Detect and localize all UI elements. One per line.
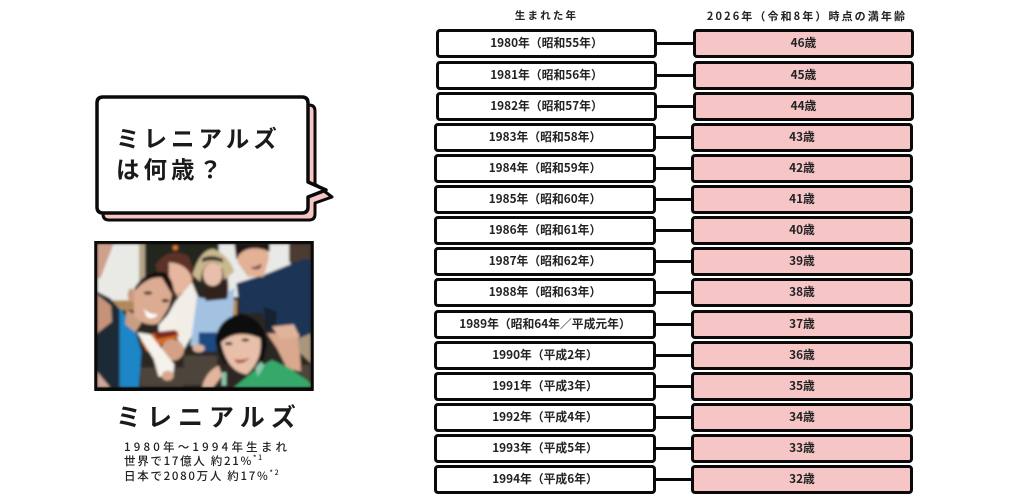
row: 1993 <box>434 434 913 463</box>
row: 1993: 1993年（平成5年） <box>492 439 598 456</box>
row: 1989: 1989年（昭和64年／平成元年） <box>459 315 631 332</box>
row: 1990: 36歳 <box>789 346 815 363</box>
bubble heading: は何歳？ <box>116 151 226 185</box>
row: 1982 <box>436 92 914 121</box>
row: 1983: 1983年（昭和58年） <box>489 128 601 145</box>
row: 1988: 38歳 <box>789 283 815 300</box>
row: 1994: 1994年（平成6年） <box>492 470 598 487</box>
row: 1992: 1992年（平成4年） <box>492 408 598 425</box>
row: 1981: 1981年（昭和56年） <box>490 66 603 83</box>
row: 1985: 1985年（昭和60年） <box>489 190 601 207</box>
summary text <box>124 438 290 484</box>
row: 1989: 37歳 <box>789 315 815 332</box>
row: 1985 <box>434 185 913 214</box>
row: 1988 <box>434 278 913 307</box>
row: 1986 <box>434 216 913 245</box>
row: 1991 <box>434 372 913 401</box>
column heading: age in 2026: 2026年（令和8年）時点の満年齢 <box>707 8 907 24</box>
row: 1981: 45歳 <box>791 66 816 83</box>
row: 1985: 41歳 <box>789 190 815 207</box>
row: 1991: 1991年（平成3年） <box>492 377 598 394</box>
summary text: 1980年〜1994年生まれ <box>124 438 290 454</box>
row: 1987: 1987年（昭和62年） <box>489 252 601 269</box>
bubble heading <box>116 120 281 185</box>
row: 1986: 40歳 <box>789 221 815 238</box>
row: 1993: 33歳 <box>789 439 815 456</box>
speech bubble <box>95 95 334 222</box>
row: 1983 <box>434 123 913 152</box>
row: 1986: 1986年（昭和61年） <box>489 221 601 238</box>
summary text: 日本で2080万人 約17%*2 <box>124 468 280 484</box>
row: 1980: 1980年（昭和55年） <box>490 34 603 51</box>
summary text: 世界で17億人 約21%*1 <box>124 453 264 469</box>
column heading: birth year: 生まれた年 <box>515 8 578 23</box>
row: 1982: 1982年（昭和57年） <box>490 97 603 114</box>
row: 1984 <box>434 154 913 183</box>
row: 1980 <box>436 29 914 58</box>
row: 1981 <box>436 61 914 90</box>
row: 1990: 1990年（平成2年） <box>492 346 598 363</box>
row: 1982: 44歳 <box>791 97 816 114</box>
row: 1991: 35歳 <box>789 377 815 394</box>
row: 1988: 1988年（昭和63年） <box>489 283 601 300</box>
row: 1980: 46歳 <box>791 34 816 51</box>
row: 1994: 32歳 <box>789 470 815 487</box>
title: millennials: ミレニアルズ <box>116 398 302 434</box>
row: 1992 <box>434 403 913 432</box>
photo: group selfie <box>94 241 314 391</box>
row: 1987: 39歳 <box>789 252 815 269</box>
row: 1994 <box>434 465 913 494</box>
row: 1983: 43歳 <box>789 128 815 145</box>
row: 1992: 34歳 <box>789 408 815 425</box>
bubble front <box>97 97 326 213</box>
row: 1987 <box>434 247 913 276</box>
row: 1984: 1984年（昭和59年） <box>489 159 601 176</box>
row: 1984: 42歳 <box>789 159 815 176</box>
bubble heading: ミレニアルズ <box>116 120 281 154</box>
bubble shadow <box>103 105 332 220</box>
row: 1990 <box>434 341 913 370</box>
row: 1989 <box>434 310 913 339</box>
